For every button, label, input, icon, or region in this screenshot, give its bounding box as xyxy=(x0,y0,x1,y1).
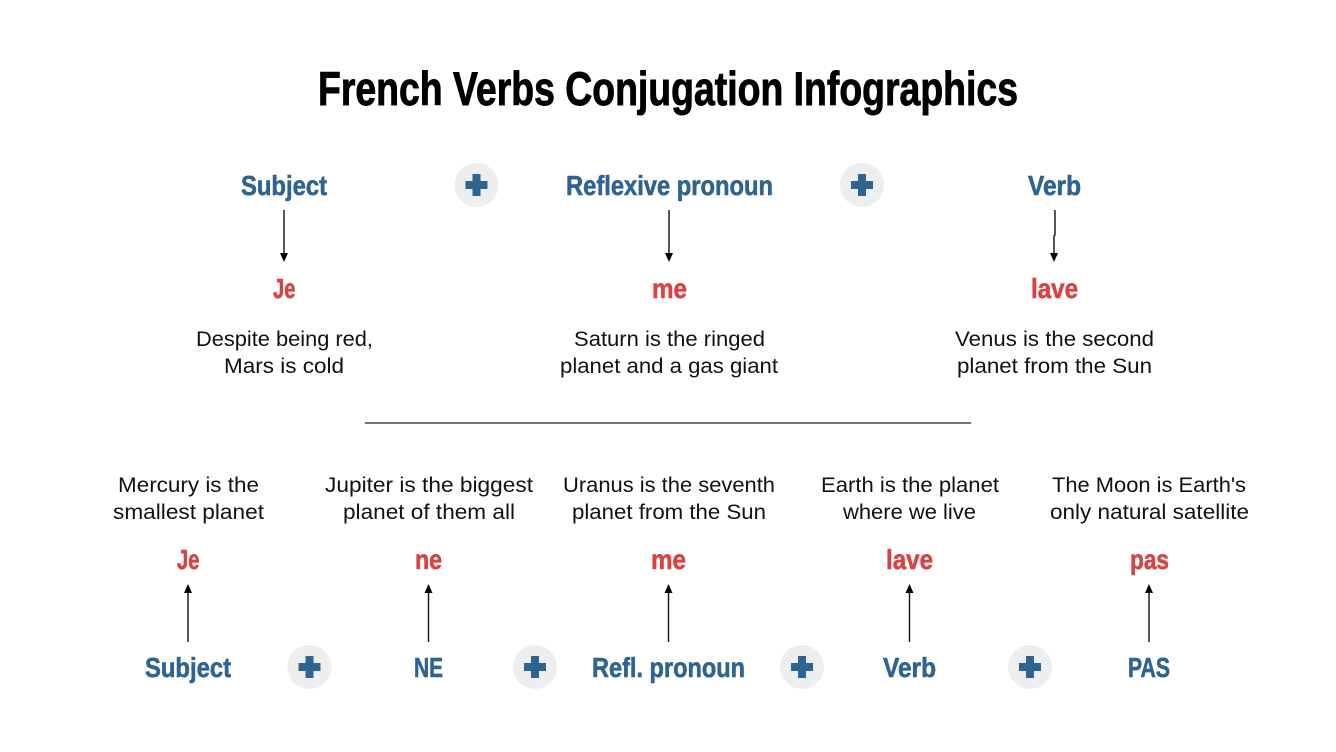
example: lave: lave xyxy=(1031,273,1078,304)
panel: top formula xyxy=(196,163,1154,378)
text: Saturn xyxy=(560,328,778,378)
icon: plus 1 xyxy=(288,645,332,689)
arrow: Verb to lave xyxy=(1050,210,1058,262)
text: Jupiter xyxy=(325,474,533,524)
text: Uranus: planet from the Sun xyxy=(572,501,766,524)
example: me: me xyxy=(652,273,687,304)
text: Moon xyxy=(1050,474,1249,524)
icon: plus 2 xyxy=(840,163,884,207)
arrow: Subject to Je xyxy=(280,210,288,262)
icon: plus 1 xyxy=(454,163,498,207)
text: Uranus: Uranus is the seventh xyxy=(563,474,775,497)
icon: plus 4 xyxy=(1008,645,1052,689)
heading: Subject: Subject xyxy=(241,170,327,201)
example: pas: pas xyxy=(1130,544,1169,575)
text: Uranus xyxy=(563,474,775,524)
text: Moon: only natural satellite xyxy=(1050,501,1249,524)
text: Mercury xyxy=(113,474,264,524)
heading: Subject: Subject xyxy=(145,652,231,683)
icon: plus 2 xyxy=(513,645,557,689)
arrow: Verb to lave xyxy=(906,584,914,642)
example: ne: ne xyxy=(415,544,442,575)
text: Earth xyxy=(821,474,999,524)
text: Venus: Venus is the second xyxy=(955,328,1154,351)
text: Jupiter: Jupiter is the biggest xyxy=(325,474,533,497)
heading: PAS: PAS xyxy=(1128,652,1170,683)
heading: NE: NE xyxy=(414,652,443,683)
heading: Verb: Verb xyxy=(1028,170,1081,201)
arrow: Reflexive pronoun to me xyxy=(665,210,673,262)
heading: Verb: Verb xyxy=(883,652,936,683)
example: lave: lave xyxy=(886,544,933,575)
panel: bottom formula xyxy=(113,474,1249,689)
heading: Refl. pronoun: Refl. pronoun xyxy=(592,652,745,683)
text: Mars xyxy=(196,328,373,378)
text: Saturn: planet and a gas giant xyxy=(560,355,778,378)
text: Jupiter: planet of them all xyxy=(343,501,515,524)
title: French Verbs Conjugation Infographics xyxy=(318,62,1018,115)
example: Je: Je xyxy=(177,545,199,576)
example: Je: Je xyxy=(273,274,295,305)
text: Moon: The Moon is Earth's xyxy=(1052,474,1246,497)
text: Mercury: Mercury is the xyxy=(118,474,259,497)
text: Mercury: smallest planet xyxy=(113,501,264,524)
arrow: Subject to Je xyxy=(184,584,192,642)
icon: plus 3 xyxy=(780,645,824,689)
text: Venus xyxy=(955,328,1154,378)
arrow: Refl. pronoun to me xyxy=(664,584,672,642)
text: Earth: Earth is the planet xyxy=(821,474,999,497)
arrow: NE to ne xyxy=(424,584,432,642)
heading: Reflexive pronoun: Reflexive pronoun xyxy=(566,170,773,201)
arrow: PAS to pas xyxy=(1145,584,1153,642)
text: Mars: Mars is cold xyxy=(224,355,344,378)
example: me: me xyxy=(651,544,686,575)
text: Saturn: Saturn is the ringed xyxy=(574,328,765,351)
text: Earth: where we live xyxy=(842,501,976,524)
text: Venus: planet from the Sun xyxy=(957,355,1152,378)
text: Mars: Despite being red, xyxy=(196,328,373,351)
